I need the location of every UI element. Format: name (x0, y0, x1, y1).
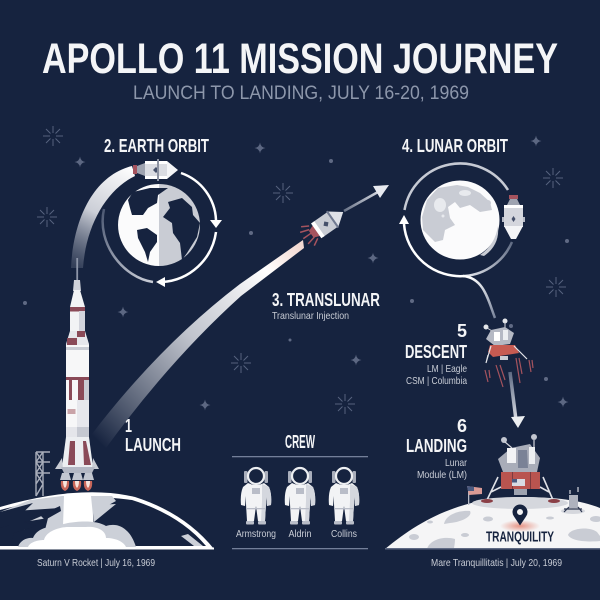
launch gantry tower (36, 452, 50, 496)
heading: landing (406, 416, 467, 481)
heading: lunar orbit: 4. LUNAR ORBIT (402, 136, 508, 156)
arrowhead (373, 185, 389, 198)
translunar trail (92, 240, 304, 448)
panel: crew (232, 432, 368, 549)
icon: earth globe (118, 184, 200, 266)
heading: launch (125, 416, 181, 455)
descent arrow (510, 372, 516, 420)
astronaut: collins: Collins (331, 528, 357, 540)
icon: location pin (513, 504, 528, 526)
icon: lunar orbit spacecraft (502, 195, 525, 239)
orbit arc bottom (404, 224, 465, 276)
panel: lunar orbit (399, 136, 525, 318)
panel: landing (385, 416, 600, 569)
panel: earth horizon launch site (0, 492, 214, 550)
orbit arc with arrow right (181, 173, 216, 220)
heading: translunar: 3. TRANSLUNAR (272, 290, 380, 310)
astronaut: armstrong: Armstrong (236, 528, 276, 540)
icon: moon (420, 180, 500, 260)
panel: descent (405, 318, 533, 428)
heading: descent: DESCENT (405, 342, 467, 362)
label: CSM Columbia: CSM | Columbia (406, 375, 467, 387)
label: tranquility: TRANQUILITY (486, 528, 554, 546)
label: LM Eagle: LM | Eagle (427, 363, 467, 375)
moon surface (385, 497, 600, 549)
icon: descending lunar module (484, 318, 533, 387)
icon: american flag (467, 486, 482, 505)
rule bottom (232, 548, 368, 549)
arrowhead bottom (156, 277, 165, 287)
heading: descent (405, 321, 467, 375)
icon: saturn v rocket (55, 258, 99, 491)
caption: landing: Mare Tranquillitatis | July 20, 1969 (431, 557, 562, 569)
orbit arc with arrow bottom (162, 232, 216, 282)
heading: landing: Lunar (445, 457, 467, 469)
heading: landing: Module (LM) (417, 469, 467, 481)
descent path (463, 276, 495, 318)
craters (409, 511, 600, 549)
icon: translunar spacecraft (297, 202, 350, 248)
lunar surface shadow (472, 497, 568, 509)
panel: earth orbit (71, 136, 222, 287)
orbit arc top (404, 163, 508, 210)
landing glow (500, 520, 540, 532)
surface baseline (385, 548, 600, 550)
heading: crew: CREW (285, 432, 315, 452)
heading: descent: 5 (457, 321, 467, 341)
arrowhead up (399, 215, 409, 224)
panel: translunar (92, 185, 389, 448)
translunar trajectory arrow (344, 192, 378, 211)
heading: landing: 6 (457, 416, 467, 436)
icon: command module (133, 159, 178, 181)
star field (23, 126, 569, 414)
astronaut: aldrin: Aldrin (288, 528, 312, 540)
orbit arc bottom right (465, 242, 512, 276)
fading orbit arc (103, 209, 153, 282)
heading: launch: 1 (125, 416, 132, 436)
launch swoosh to orbit (71, 166, 135, 268)
icon: science package (561, 487, 585, 514)
subtitle: LAUNCH TO LANDING, JULY 16-20, 1969 (133, 83, 469, 104)
heading: launch: LAUNCH (125, 435, 181, 455)
heading: earth orbit: 2. EARTH ORBIT (104, 136, 209, 156)
icon: lunar module landed (481, 434, 560, 503)
arrowhead (511, 416, 525, 428)
arrowhead right (210, 220, 222, 228)
caption: launch: Saturn V Rocket | July 16, 1969 (37, 557, 155, 569)
rule top (232, 456, 368, 457)
heading: landing: LANDING (406, 436, 467, 456)
label: translunar injection: Translunar Injection (272, 310, 349, 322)
